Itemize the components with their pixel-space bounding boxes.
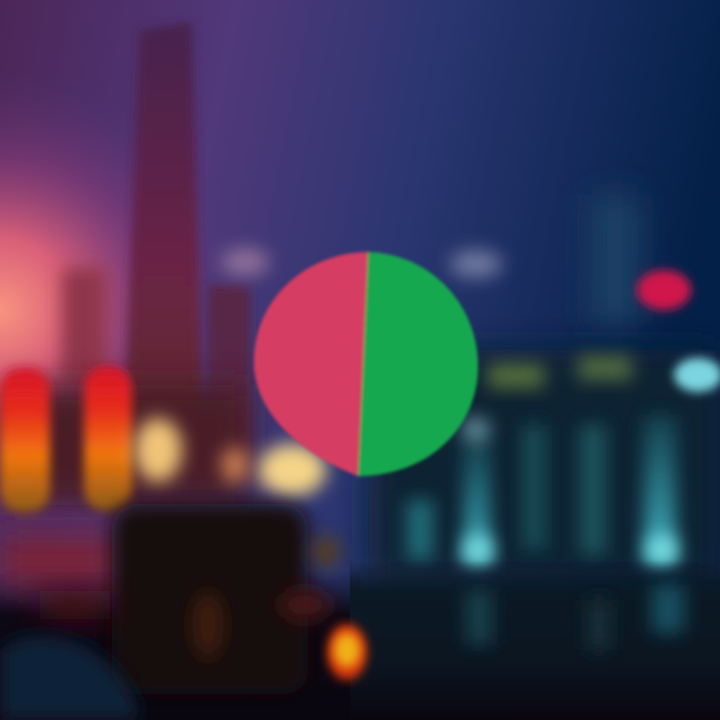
skyline: distant right tower [592, 195, 638, 325]
warm glows at street level [134, 418, 326, 496]
light: cyan lamp [674, 358, 720, 392]
foreground: lower left dark blue shape [0, 636, 140, 720]
foreground: dark ground [0, 535, 720, 720]
light: amber tail lamp [327, 624, 367, 680]
pie slice: green share [358, 252, 478, 476]
foreground: dark vehicle silhouette [40, 504, 339, 694]
pie slice: red share [254, 252, 368, 476]
right building [370, 350, 720, 580]
reflections in water [466, 585, 684, 650]
pie chart [254, 252, 478, 476]
faint clouds around chart [221, 248, 502, 278]
building lights: teal columns [407, 415, 677, 565]
light: red sign [637, 270, 691, 310]
skyline: left towers [0, 22, 250, 505]
left red and orange lanterns [0, 366, 132, 513]
